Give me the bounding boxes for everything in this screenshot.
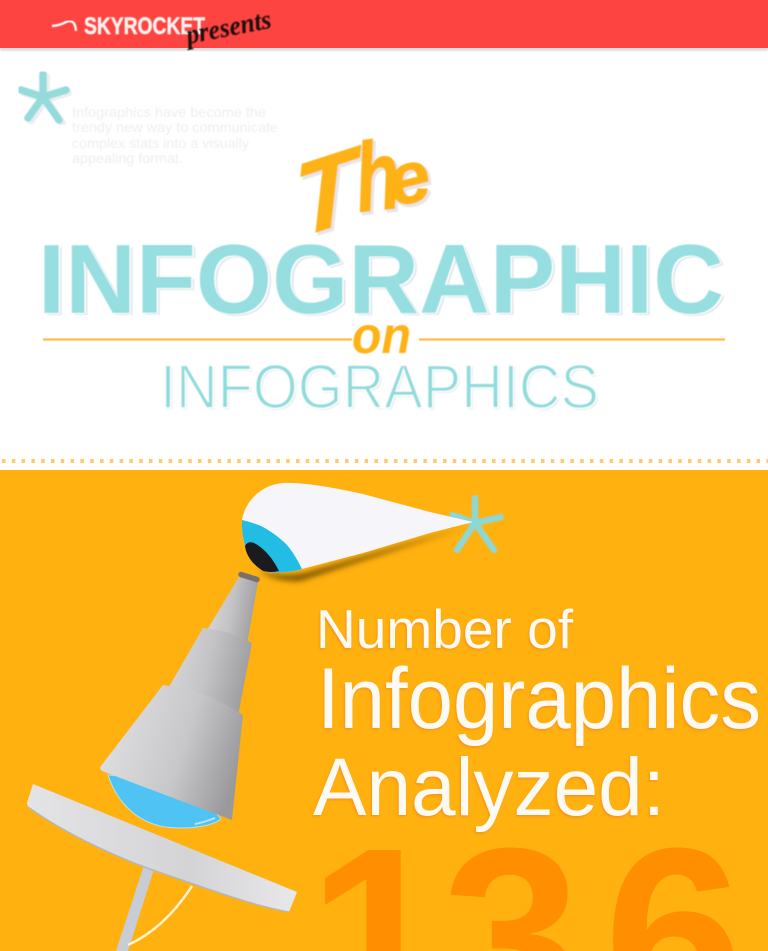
intro paragraph: appealing format. [72, 150, 183, 166]
intro paragraph [72, 104, 278, 166]
icon: intro asterisk [21, 74, 69, 122]
pupil [245, 542, 279, 572]
header bar [0, 0, 768, 51]
title word: The: e [381, 137, 441, 225]
objective lower tier [100, 685, 243, 820]
title word: The: e [379, 135, 439, 223]
title word: The: h [350, 119, 405, 233]
eyepiece cap [241, 574, 257, 580]
iris [242, 520, 302, 572]
intro paragraph: trendy new way to communicate [72, 119, 278, 135]
wire [128, 886, 192, 945]
heading line 3: Analyzed: [313, 742, 665, 833]
objective middle tier [166, 628, 252, 716]
lens highlight [195, 818, 215, 824]
title word: The: T [294, 125, 371, 263]
title word: INFOGRAPHICS: INFOGRAPHICS [160, 353, 599, 422]
icon: eye [242, 483, 473, 581]
objective top tier [206, 577, 258, 650]
big number 136 [308, 796, 743, 951]
title word: The: T [291, 123, 368, 260]
heading: number of infographics analyzed: Analyzed: [312, 744, 664, 834]
title word: INFOGRAPHICS: INFOGRAPHICS [162, 354, 600, 424]
intro paragraph: Infographics have become the [72, 104, 266, 120]
stage plate lower edge [28, 807, 289, 912]
heading: number of infographics analyzed [312, 598, 761, 834]
intro paragraph: complex stats into a visually [72, 135, 249, 151]
icon: small asterisk at eye tip [452, 498, 501, 550]
lens [108, 775, 221, 828]
icon: microscope [27, 574, 297, 951]
title word: INFOGRAPHIC: INFOGRAPHIC [40, 225, 726, 335]
title word: The: h [352, 121, 407, 235]
stem [116, 862, 155, 951]
brand name: SKYROCKET [84, 13, 205, 40]
orange panel background [0, 470, 768, 951]
title word: INFOGRAPHIC: INFOGRAPHIC [38, 224, 724, 334]
title word: The [291, 119, 441, 263]
dotted divider [2, 459, 768, 463]
icon: rocket swoosh [52, 21, 76, 31]
title word: INFOGRAPHIC: INFOGRAPHIC [41, 226, 727, 336]
heading: number of infographics analyzed: Number of [315, 600, 573, 662]
script word: on: on [352, 307, 411, 365]
heading line 1: Number of [316, 598, 574, 660]
stage plate [27, 784, 297, 912]
presents script: presents [182, 4, 274, 50]
